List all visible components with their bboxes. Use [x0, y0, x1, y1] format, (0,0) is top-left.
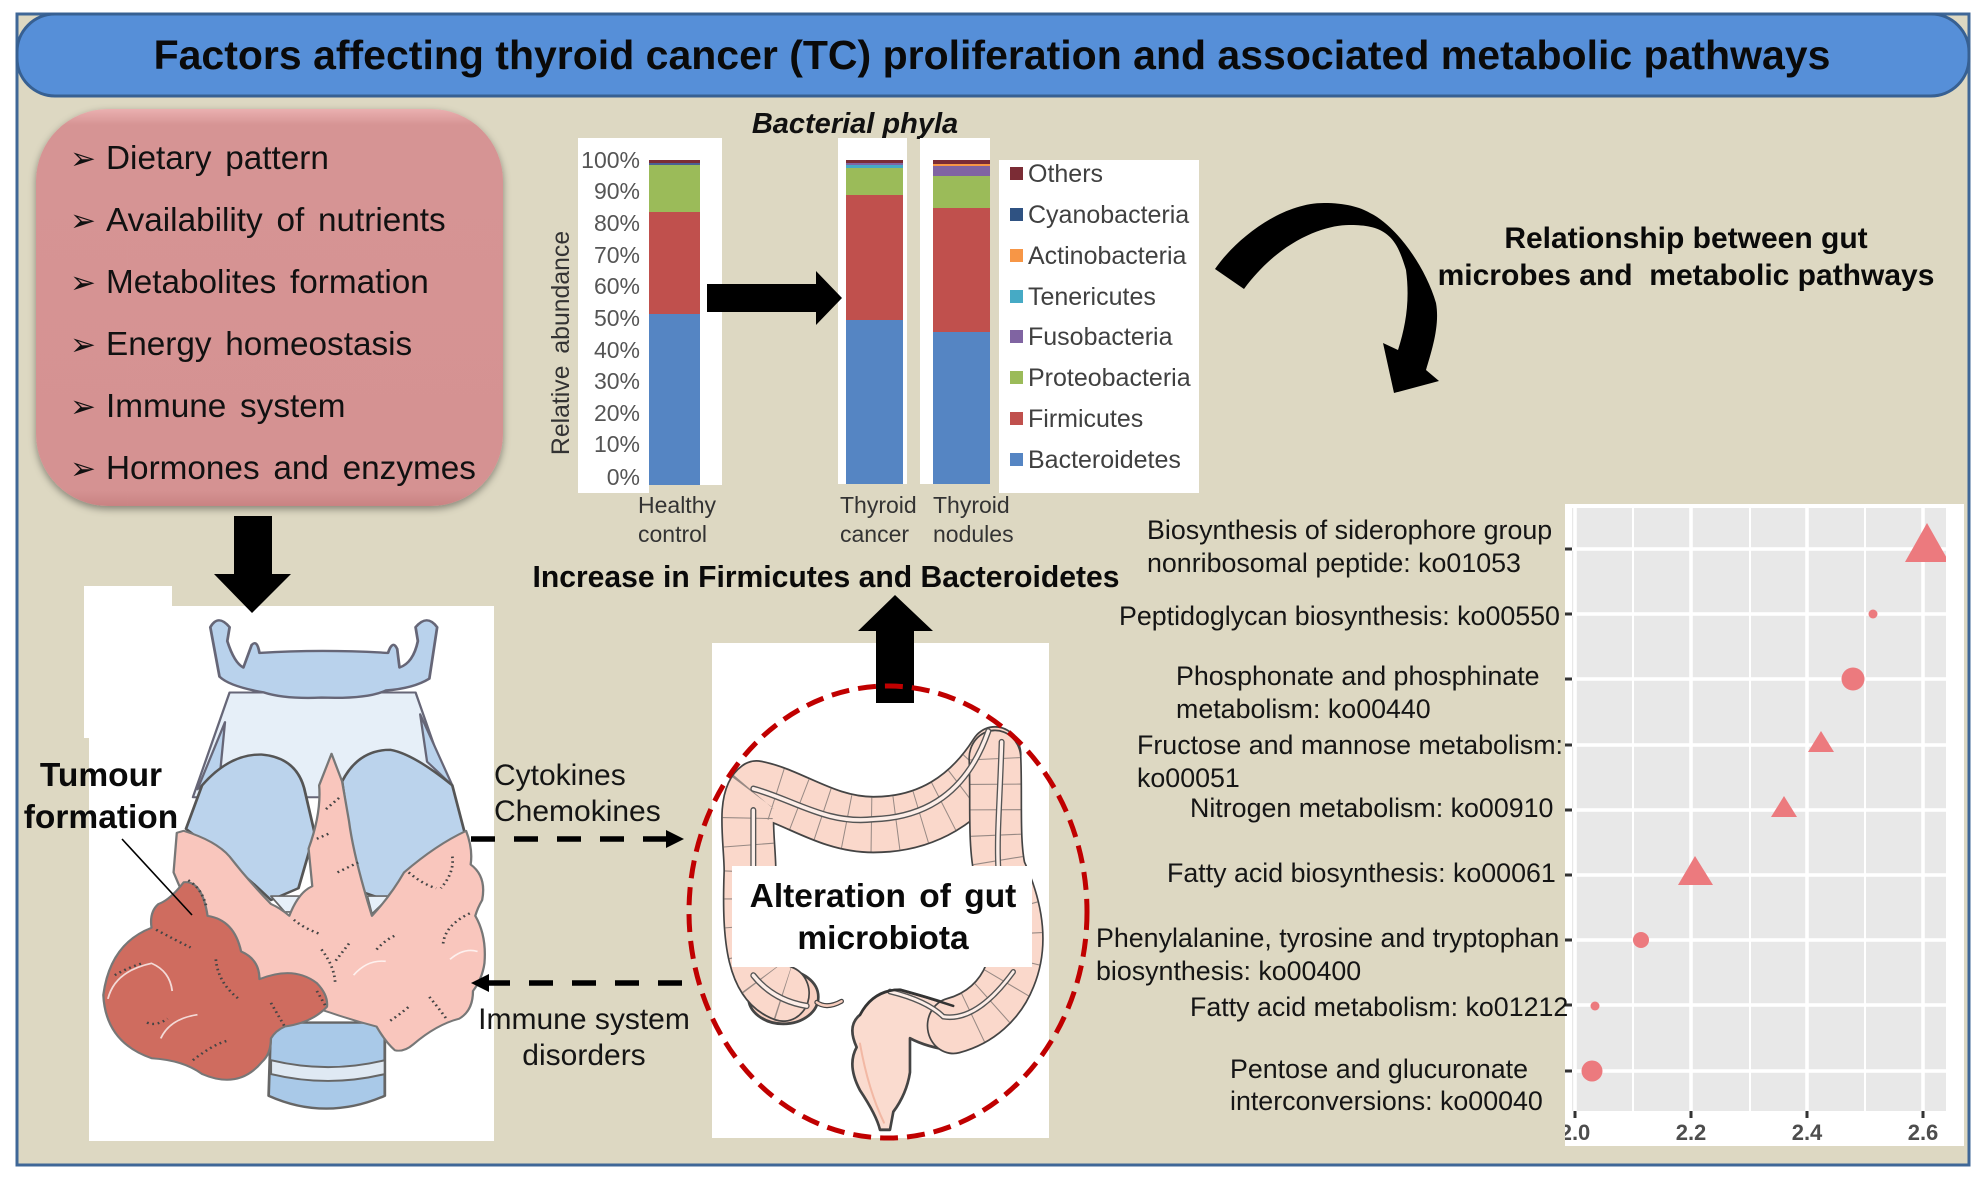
pathway labels: ko00051	[1137, 763, 1240, 793]
chart: bacterial phyla	[548, 108, 1199, 547]
pathway labels	[1096, 515, 1568, 1116]
panel: factors list: ➢	[70, 203, 96, 239]
y axis labels: 70%	[594, 242, 640, 268]
panel: factors list: Hormones and enzymes	[106, 450, 476, 487]
y axis labels: 80%	[594, 210, 640, 236]
relationship heading: Relationship between gut	[1504, 222, 1868, 255]
x axis ticks	[1565, 1124, 1938, 1140]
title: Factors affecting thyroid cancer (TC) proliferation and associated metabolic pathways	[154, 32, 1830, 78]
icon: large intestine	[748, 731, 1017, 1130]
x axis ticks: 2.6	[1908, 1120, 1938, 1145]
x axis labels: Healthy	[638, 492, 716, 518]
legend: Firmicutes	[1028, 405, 1143, 433]
y axis labels: 10%	[594, 431, 640, 457]
y axis labels: 100%	[581, 147, 640, 173]
bar: healthy control	[649, 160, 700, 485]
pathway labels: Fatty acid biosynthesis: ko00061	[1167, 858, 1556, 888]
legend	[999, 160, 1199, 493]
tracheal rings	[271, 896, 390, 914]
cytokines label: Cytokines	[494, 759, 626, 792]
membrane	[193, 692, 452, 797]
x axis labels: nodules	[933, 521, 1014, 547]
x axis ticks: 2.2	[1676, 1120, 1706, 1145]
cartilage lobes	[186, 755, 315, 900]
arrow: curved	[1215, 203, 1439, 393]
legend: Actinobacteria	[1028, 242, 1187, 270]
panel: factors list: Availability of nutrients	[106, 202, 446, 239]
arrow: immune dashed	[471, 974, 686, 992]
panel: thyroid illustration	[84, 586, 494, 1141]
pathway labels: Phosphonate and phosphinate	[1176, 661, 1540, 691]
immune label	[478, 1003, 690, 1072]
legend: Bacteroidetes	[1028, 446, 1181, 474]
hyoid	[210, 620, 437, 698]
x axis ticks: 2.4	[1792, 1120, 1823, 1145]
arrow: factors to thyroid	[214, 516, 291, 613]
panel: factors list: ➢	[70, 389, 96, 425]
immune label: Immune system	[478, 1003, 690, 1036]
cytokines label	[494, 759, 661, 828]
y axis labels	[581, 147, 640, 490]
panel: factors list: ➢	[70, 141, 96, 177]
y axis labels: 20%	[594, 400, 640, 426]
y axis labels: 50%	[594, 305, 640, 331]
y axis labels: 30%	[594, 368, 640, 394]
legend: Fusobacteria	[1028, 323, 1173, 351]
y axis title: Relative abundance	[548, 231, 575, 455]
y axis labels: 40%	[594, 337, 640, 363]
x axis labels: Thyroid	[933, 492, 1010, 518]
tumour formation label	[24, 757, 192, 915]
gut label: Alteration of gut	[750, 878, 1016, 915]
x axis labels: cancer	[840, 521, 909, 547]
pathway labels: Peptidoglycan biosynthesis: ko00550	[1119, 601, 1560, 631]
title banner	[17, 14, 1969, 96]
pathway labels: metabolism: ko00440	[1176, 694, 1431, 724]
data points	[1582, 523, 1949, 1082]
panel: factors list: Dietary pattern	[106, 140, 329, 177]
panel: factors list: Metabolites formation	[106, 264, 429, 301]
pathway labels: Nitrogen metabolism: ko00910	[1190, 793, 1553, 823]
gut label	[732, 866, 1032, 967]
x axis labels: control	[638, 521, 707, 547]
immune label: disorders	[522, 1039, 646, 1072]
cytokines label: Chemokines	[494, 795, 661, 828]
bar: thyroid cancer	[846, 160, 903, 484]
arrow: gut to phyla	[858, 595, 933, 703]
panel: factors list: Energy homeostasis	[106, 326, 412, 363]
increase heading: Increase in Firmicutes and Bacteroidetes	[532, 561, 1120, 594]
pink lobes	[174, 754, 485, 1051]
dashed ellipse	[689, 686, 1087, 1138]
pathway labels: nonribosomal peptide: ko01053	[1147, 548, 1521, 578]
panel: factors list: ➢	[70, 451, 96, 487]
y axis labels: 90%	[594, 178, 640, 204]
x axis labels: Thyroid	[840, 492, 917, 518]
panel: factors list: Immune system	[106, 388, 345, 425]
chart heading: Bacterial phyla	[752, 108, 958, 140]
gut label: microbiota	[797, 920, 969, 957]
trachea	[269, 1023, 385, 1109]
panel: factors list: ➢	[70, 265, 96, 301]
pathway labels: Fatty acid metabolism: ko01212	[1190, 992, 1568, 1022]
x axis ticks: 2.0	[1560, 1120, 1590, 1145]
lobule hatching	[115, 797, 473, 1060]
x axis labels	[638, 492, 1014, 547]
bar: thyroid nodules	[933, 160, 990, 484]
relationship heading	[1438, 222, 1934, 292]
tumour formation label: formation	[24, 799, 178, 836]
pathway labels: Phenylalanine, tyrosine and tryptophan	[1096, 923, 1559, 953]
legend: Proteobacteria	[1028, 364, 1191, 392]
panel: gut microbiota	[689, 595, 1087, 1138]
legend: Tenericutes	[1028, 283, 1156, 311]
y axis labels: 0%	[607, 464, 640, 490]
arrow: cytokines dashed	[471, 830, 684, 848]
tumour formation label: Tumour	[40, 757, 162, 794]
pathway labels: Pentose and glucuronate	[1230, 1054, 1528, 1084]
panel: factors list	[36, 109, 503, 506]
pathway labels: biosynthesis: ko00400	[1096, 956, 1361, 986]
relationship heading: microbes and metabolic pathways	[1438, 259, 1934, 292]
arrow: healthy to cancer	[707, 271, 842, 325]
chart: pathway dot plot	[1560, 504, 1964, 1146]
y axis labels: 60%	[594, 273, 640, 299]
pathway labels: Biosynthesis of siderophore group	[1147, 515, 1552, 545]
panel: factors list: ➢	[70, 327, 96, 363]
legend: Cyanobacteria	[1028, 201, 1189, 229]
legend: Others	[1028, 160, 1103, 188]
tumour	[103, 882, 327, 1080]
pathway labels: interconversions: ko00040	[1230, 1086, 1543, 1116]
pathway labels: Fructose and mannose metabolism:	[1137, 730, 1563, 760]
